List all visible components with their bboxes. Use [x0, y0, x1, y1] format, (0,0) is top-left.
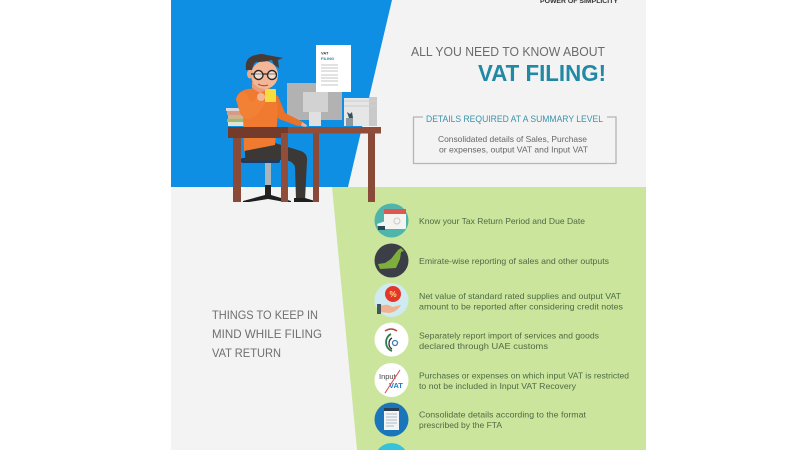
icon: percent in hand: %: [389, 290, 397, 299]
face: [251, 61, 278, 89]
neck: [252, 82, 268, 93]
document: VAT filing: FILING: [321, 56, 334, 61]
icon: report form: [374, 402, 408, 436]
text: import of services: Separately report import of services and goods: [419, 330, 599, 340]
desk: [228, 127, 381, 202]
title: [411, 44, 606, 86]
text: net value: amount to be reported after considering credit notes: [419, 302, 623, 312]
text: purchases restricted: [419, 370, 629, 391]
icon: calendar: [374, 204, 408, 238]
text: consolidate details: [419, 410, 587, 430]
icon: UAE map: [374, 244, 408, 278]
document: VAT filing: VAT: [321, 50, 329, 56]
text: import of services: declared through UAE customs: [419, 341, 548, 351]
summary details box: DETAILS REQUIRED AT A SUMMARY LEVEL: [426, 114, 603, 125]
legs: [245, 143, 307, 200]
far arm: [270, 92, 304, 126]
raised arm: [236, 93, 266, 119]
icon: input VAT restricted: VAT: [389, 381, 403, 390]
text: emirate-wise reporting: Emirate-wise reporting of sales and other outputs: [419, 256, 609, 266]
books: [226, 108, 247, 126]
text: net value: Net value of standard rated supplies and output VAT: [419, 291, 621, 301]
text: purchases restricted: to not be included in Input VAT Recovery: [419, 381, 577, 391]
document: VAT filing: [316, 45, 351, 92]
title: ALL YOU NEED TO KNOW ABOUT: [411, 44, 605, 59]
paper stack and pen holder: [344, 97, 377, 126]
text: consolidate details: Consolidate details according to the format: [419, 410, 587, 420]
title: VAT FILING!: [478, 60, 606, 86]
text: purchases restricted: Purchases or expenses on which input VAT is restricted: [419, 370, 629, 380]
hair: [246, 54, 283, 70]
man: [236, 54, 315, 202]
green list panel: [332, 187, 646, 450]
section heading: things to keep in mind: MIND WHILE FILING: [212, 327, 322, 341]
computer monitor: [287, 83, 342, 126]
text: net value: [419, 291, 623, 312]
illustration: man at desk: [226, 45, 381, 202]
blue header shape: [171, 0, 392, 187]
torso: [236, 87, 278, 151]
icon: next item (cropped): [378, 443, 405, 450]
section heading: things to keep in mind: [212, 308, 322, 360]
text: consolidate details: prescribed by the FTA: [419, 420, 502, 430]
chair: [241, 158, 291, 202]
icon: percent in hand: [374, 283, 408, 317]
text: tax return period: Know your Tax Return Period and Due Date: [419, 216, 585, 226]
icon: input VAT restricted: [374, 363, 408, 397]
summary details box: or expenses, output VAT and Input VAT: [439, 144, 588, 154]
icon: input VAT restricted: Input: [379, 372, 397, 381]
background panel: [171, 0, 646, 450]
section heading: things to keep in mind: VAT RETURN: [212, 346, 281, 360]
yellow mug: [257, 89, 276, 102]
glasses: [251, 73, 277, 75]
text: import of services: [419, 330, 599, 351]
summary details box: [414, 114, 616, 164]
section heading: things to keep in mind: THINGS TO KEEP IN: [212, 308, 318, 322]
icon: UAE customs: [374, 322, 408, 356]
summary details box: Consolidated details of Sales, Purchase: [438, 134, 587, 144]
